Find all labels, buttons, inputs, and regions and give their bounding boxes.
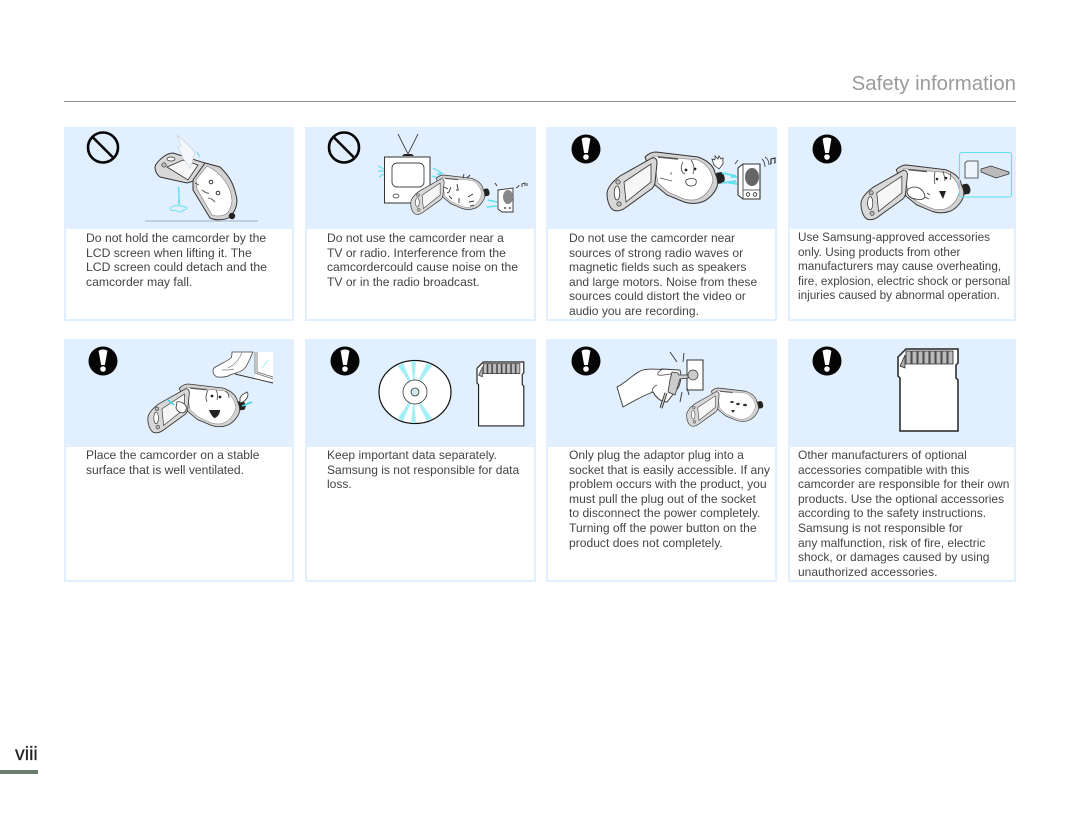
icon: warning: [812, 134, 842, 164]
panel: adaptor plug: [546, 339, 777, 582]
panel: optional accessories: [788, 339, 1016, 582]
text: Keep important data separately. Samsung is not responsible for data loss.: [327, 448, 519, 491]
page number: viii: [15, 743, 38, 765]
icon: prohibited: [88, 132, 118, 162]
icon: disc: [379, 360, 451, 424]
panel: do not hold by LCD: [64, 127, 294, 321]
panel: keep data: [305, 339, 536, 582]
icon: warning: [812, 346, 842, 376]
text: Use Samsung-approved accessories only. Using products from other manufacturers may cause overheating, fire, explosion, electric shock or personal injuries caused by abnormal operation.: [798, 231, 1010, 302]
header rule: [64, 101, 1016, 102]
icon: warning: [572, 346, 600, 376]
panel: approved accessories: [788, 127, 1016, 321]
text: Place the camcorder on a stable surface that is well ventilated.: [86, 448, 259, 477]
icon: prohibited: [329, 132, 359, 162]
title: Safety information: [852, 73, 1016, 95]
icon: warning: [88, 346, 118, 376]
panel: radio waves: [546, 127, 777, 321]
icon: memory card: [477, 362, 524, 426]
text: Other manufacturers of optional accessories compatible with this camcorder are responsible for their own products. Use the optional accessories according to the safety instructions. Samsung is not responsible for any malfunction, risk of fire, electric shock, or damages caused by using unauthorized accessories.: [798, 448, 1009, 579]
icon: warning: [330, 346, 360, 376]
text: Do not hold the camcorder by the LCD screen when lifting it. The LCD screen could detach and the camcorder may fall.: [86, 231, 267, 289]
icon: warning: [572, 134, 600, 164]
panel: TV or radio: [305, 127, 536, 321]
panel: stable surface: [64, 339, 294, 582]
text: Do not use the camcorder near sources of strong radio waves or magnetic fields such as speakers and large motors. Noise from these sources could distort the video or audio you are recording.: [569, 231, 757, 318]
text: Do not use the camcorder near a TV or radio. Interference from the camcordercould cause noise on the TV or in the radio broadcast.: [327, 231, 518, 289]
page number bar: [0, 770, 38, 774]
icon: memory card: [898, 349, 958, 431]
text: Only plug the adaptor plug into a socket that is easily accessible. If any problem occurs with the product, you must pull the plug out of the socket to disconnect the power completely. Turning off the power button on the product does not completely.: [569, 448, 770, 550]
